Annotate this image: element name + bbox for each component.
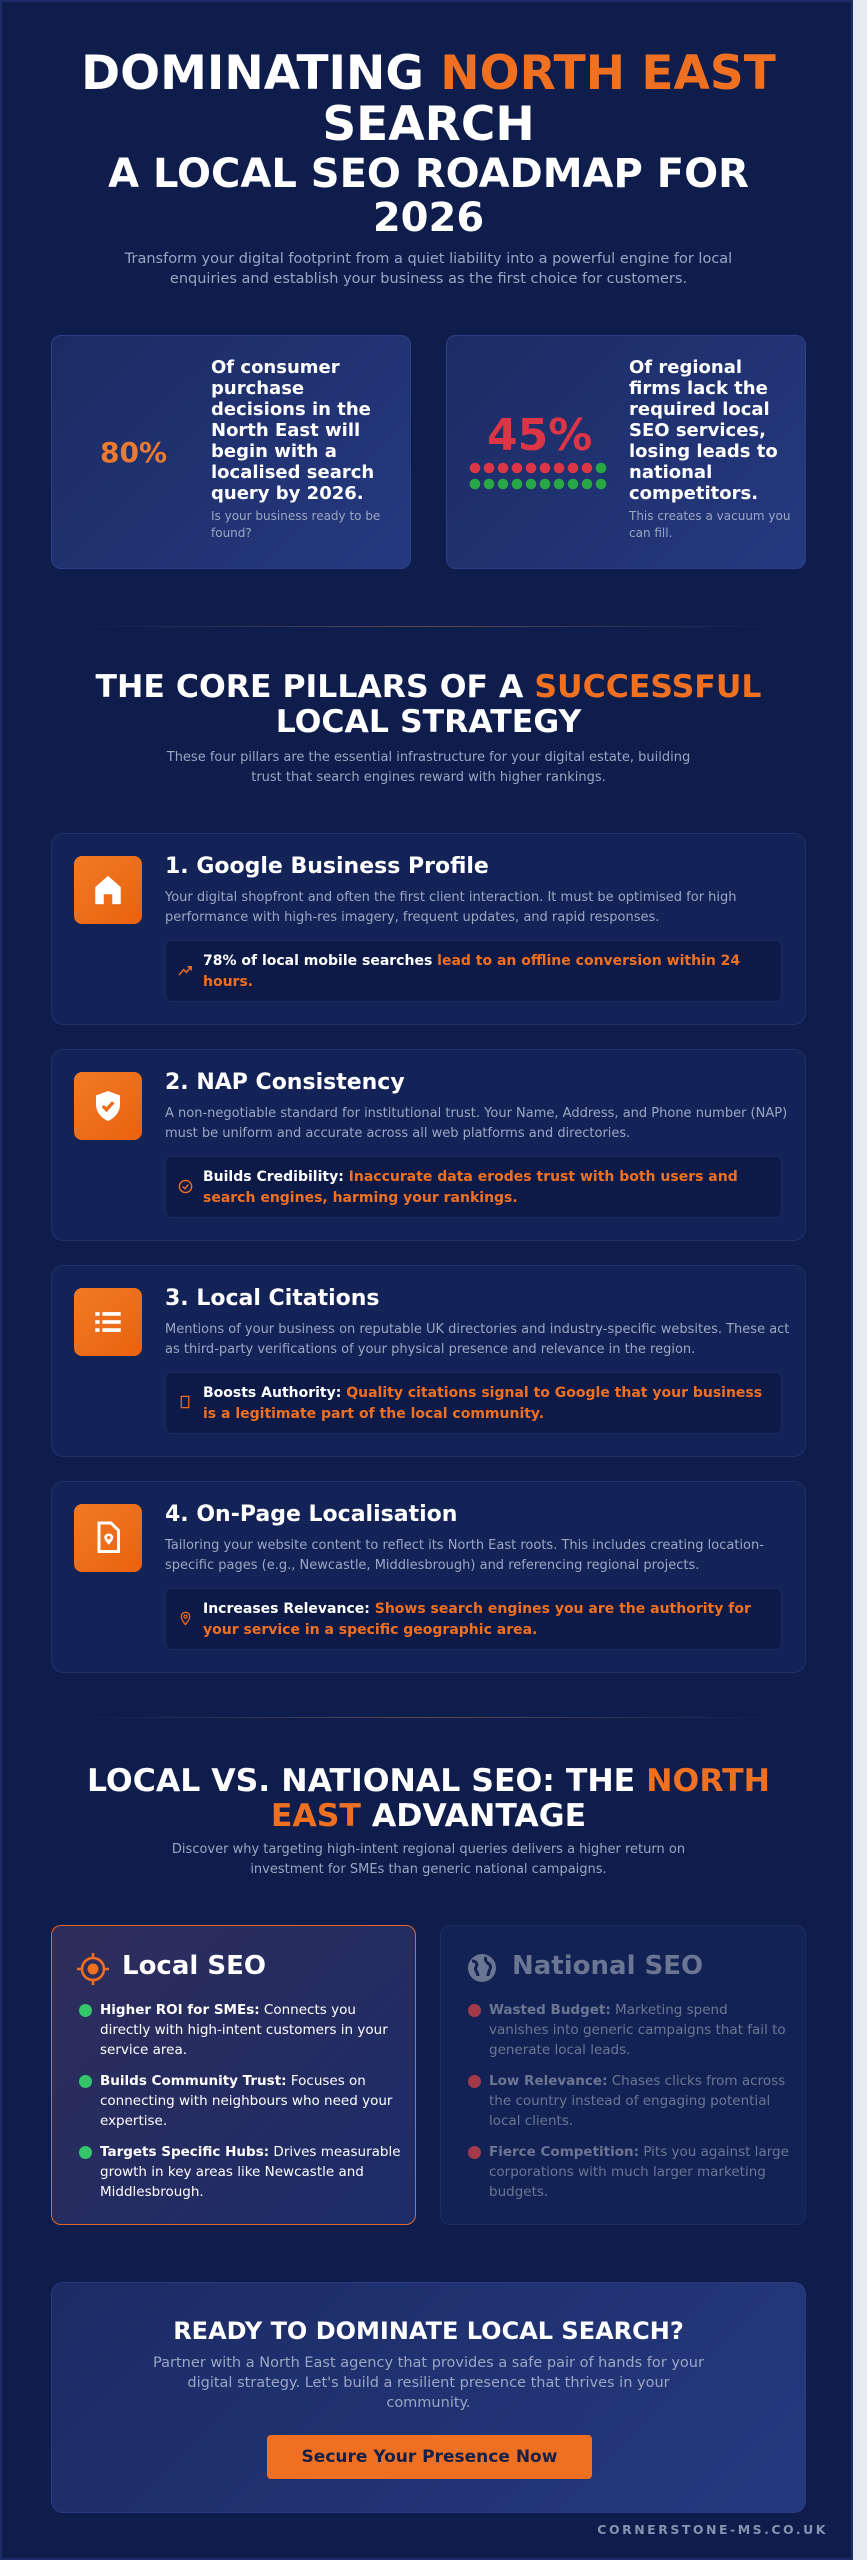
button: Secure Your Presence Now <box>302 2447 557 2467</box>
list: local benefits <box>79 2002 401 2200</box>
section heading: local vs national: LOCAL VS. NATIONAL SEO: THE NORTH <box>87 1763 770 1799</box>
section heading: local vs national: EAST ADVANTAGE <box>271 1798 586 1834</box>
panel: pillar 4: 4. On-Page Localisation <box>165 1502 457 1527</box>
footer: CORNERSTONE-MS.CO.UK <box>597 2522 828 2537</box>
panel: national SEO: Low Relevance: Chases clicks from across the country instead of engaging potential local clients. <box>489 2073 785 2129</box>
title: DOMINATING NORTH EAST <box>81 46 776 101</box>
panel: pillar 1: Your digital shopfront and often the first client interaction. It must be optimised for high performance with high-res imagery, frequent updates, and rapid responses. <box>165 890 737 925</box>
button <box>267 2435 592 2479</box>
callout: 78% of local mobile searches lead to an offline conversion within 24 hours. <box>203 953 740 990</box>
callout <box>165 1156 782 1218</box>
section heading: core pillars: LOCAL STRATEGY <box>276 704 581 740</box>
stat text: Of regional firms lack the required local SEO services, losing leads to national competitors. <box>629 357 778 504</box>
icon: target <box>77 1953 109 1985</box>
icon: list <box>74 1288 142 1356</box>
panel: call to action: Partner with a North East agency that provides a safe pair of hands for your digital strategy. Let's build a resilient presence that thrives in your community. <box>153 2355 704 2411</box>
stat number 80%: 80% <box>100 436 167 469</box>
panel: pillar 2: 2. NAP Consistency <box>165 1070 405 1095</box>
subtitle: Transform your digital footprint from a quiet liability into a powerful engine for local enquiries and establish your business as the first choice for customers. <box>125 251 732 287</box>
section heading: local vs national: Discover why targeting high-intent regional queries delivers a higher return on investment for SMEs than generic national campaigns. <box>172 1842 685 1877</box>
panel: pillar 1 <box>51 833 806 1025</box>
panel: national SEO: Wasted Budget: Marketing spend vanishes into generic campaigns that fail to generate local leads. <box>489 2002 786 2058</box>
title: A LOCAL SEO ROADMAP FOR <box>108 151 749 197</box>
panel: national SEO: Fierce Competition: Pits you against large corporations with much larger marketing budgets. <box>489 2144 789 2200</box>
callout: Builds Credibility: Inaccurate data erodes trust with both users and search engines, harming your rankings. <box>203 1169 738 1206</box>
icon: location file <box>74 1504 142 1572</box>
panel: local SEO: Higher ROI for SMEs: Connects you directly with high-intent customers in your service area. <box>100 2002 388 2058</box>
stat number 45%: 45% <box>487 410 592 461</box>
panel: pillar 4: Tailoring your website content to reflect its North East roots. This includes creating location-specific pages (e.g., Newcastle, Middlesbrough) and referencing regional projects. <box>165 1538 764 1573</box>
panel: local SEO: Targets Specific Hubs: Drives measurable growth in key areas like Newcastle and Middlesbrough. <box>100 2144 401 2200</box>
panel: pillar 3 <box>51 1265 806 1457</box>
title <box>81 46 776 241</box>
stat text: This creates a vacuum you can fill. <box>629 509 790 540</box>
title: 2026 <box>373 195 484 241</box>
dot chart <box>470 462 606 490</box>
section heading: core pillars <box>96 669 761 785</box>
icon: globe <box>468 1954 496 1982</box>
callout <box>165 1588 782 1650</box>
stat text: Of consumer purchase decisions in the North East will begin with a localised search query by 2026. <box>211 357 374 504</box>
panel: local SEO: Local SEO <box>122 1951 266 1981</box>
icon: house <box>74 856 142 924</box>
panel: national SEO: National SEO <box>512 1951 703 1981</box>
section heading: core pillars: These four pillars are the essential infrastructure for your digital estate, building trust that search engines reward with higher rankings. <box>167 750 690 785</box>
panel: call to action <box>51 2282 806 2513</box>
callout: Increases Relevance: Shows search engines you are the authority for your service in a specific geographic area. <box>203 1601 751 1638</box>
panel: pillar 2: A non-negotiable standard for institutional trust. Your Name, Address, and Phone number (NAP) must be uniform and accurate across all web platforms and directories. <box>165 1106 787 1141</box>
panel: call to action: READY TO DOMINATE LOCAL SEARCH? <box>173 2317 684 2345</box>
panel: pillar 3: 3. Local Citations <box>165 1286 380 1311</box>
callout <box>165 1372 782 1434</box>
panel: national SEO <box>440 1925 806 2225</box>
callout <box>165 940 782 1002</box>
panel: pillar 4 <box>51 1481 806 1673</box>
panel: pillar 3: Mentions of your business on reputable UK directories and industry-specific websites. These act as third-party verifications of your physical presence and relevance in the region. <box>165 1322 789 1357</box>
stat card: 45% <box>446 335 806 569</box>
icon: shield <box>74 1072 142 1140</box>
stat text: Is your business ready to be found? <box>211 509 380 540</box>
panel: local SEO <box>51 1925 416 2225</box>
panel: pillar 2 <box>51 1049 806 1241</box>
list: national drawbacks <box>468 2002 789 2200</box>
callout: Boosts Authority: Quality citations signal to Google that your business is a legitimate part of the local community. <box>203 1385 762 1422</box>
section heading: local vs national <box>87 1763 770 1877</box>
section heading: core pillars: THE CORE PILLARS OF A SUCCESSFUL <box>96 669 761 705</box>
panel: pillar 1: 1. Google Business Profile <box>165 854 489 879</box>
stat card: 80% <box>51 335 411 569</box>
title: SEARCH <box>322 97 535 152</box>
panel: local SEO: Builds Community Trust: Focuses on connecting with neighbours who need your expertise. <box>100 2073 392 2129</box>
